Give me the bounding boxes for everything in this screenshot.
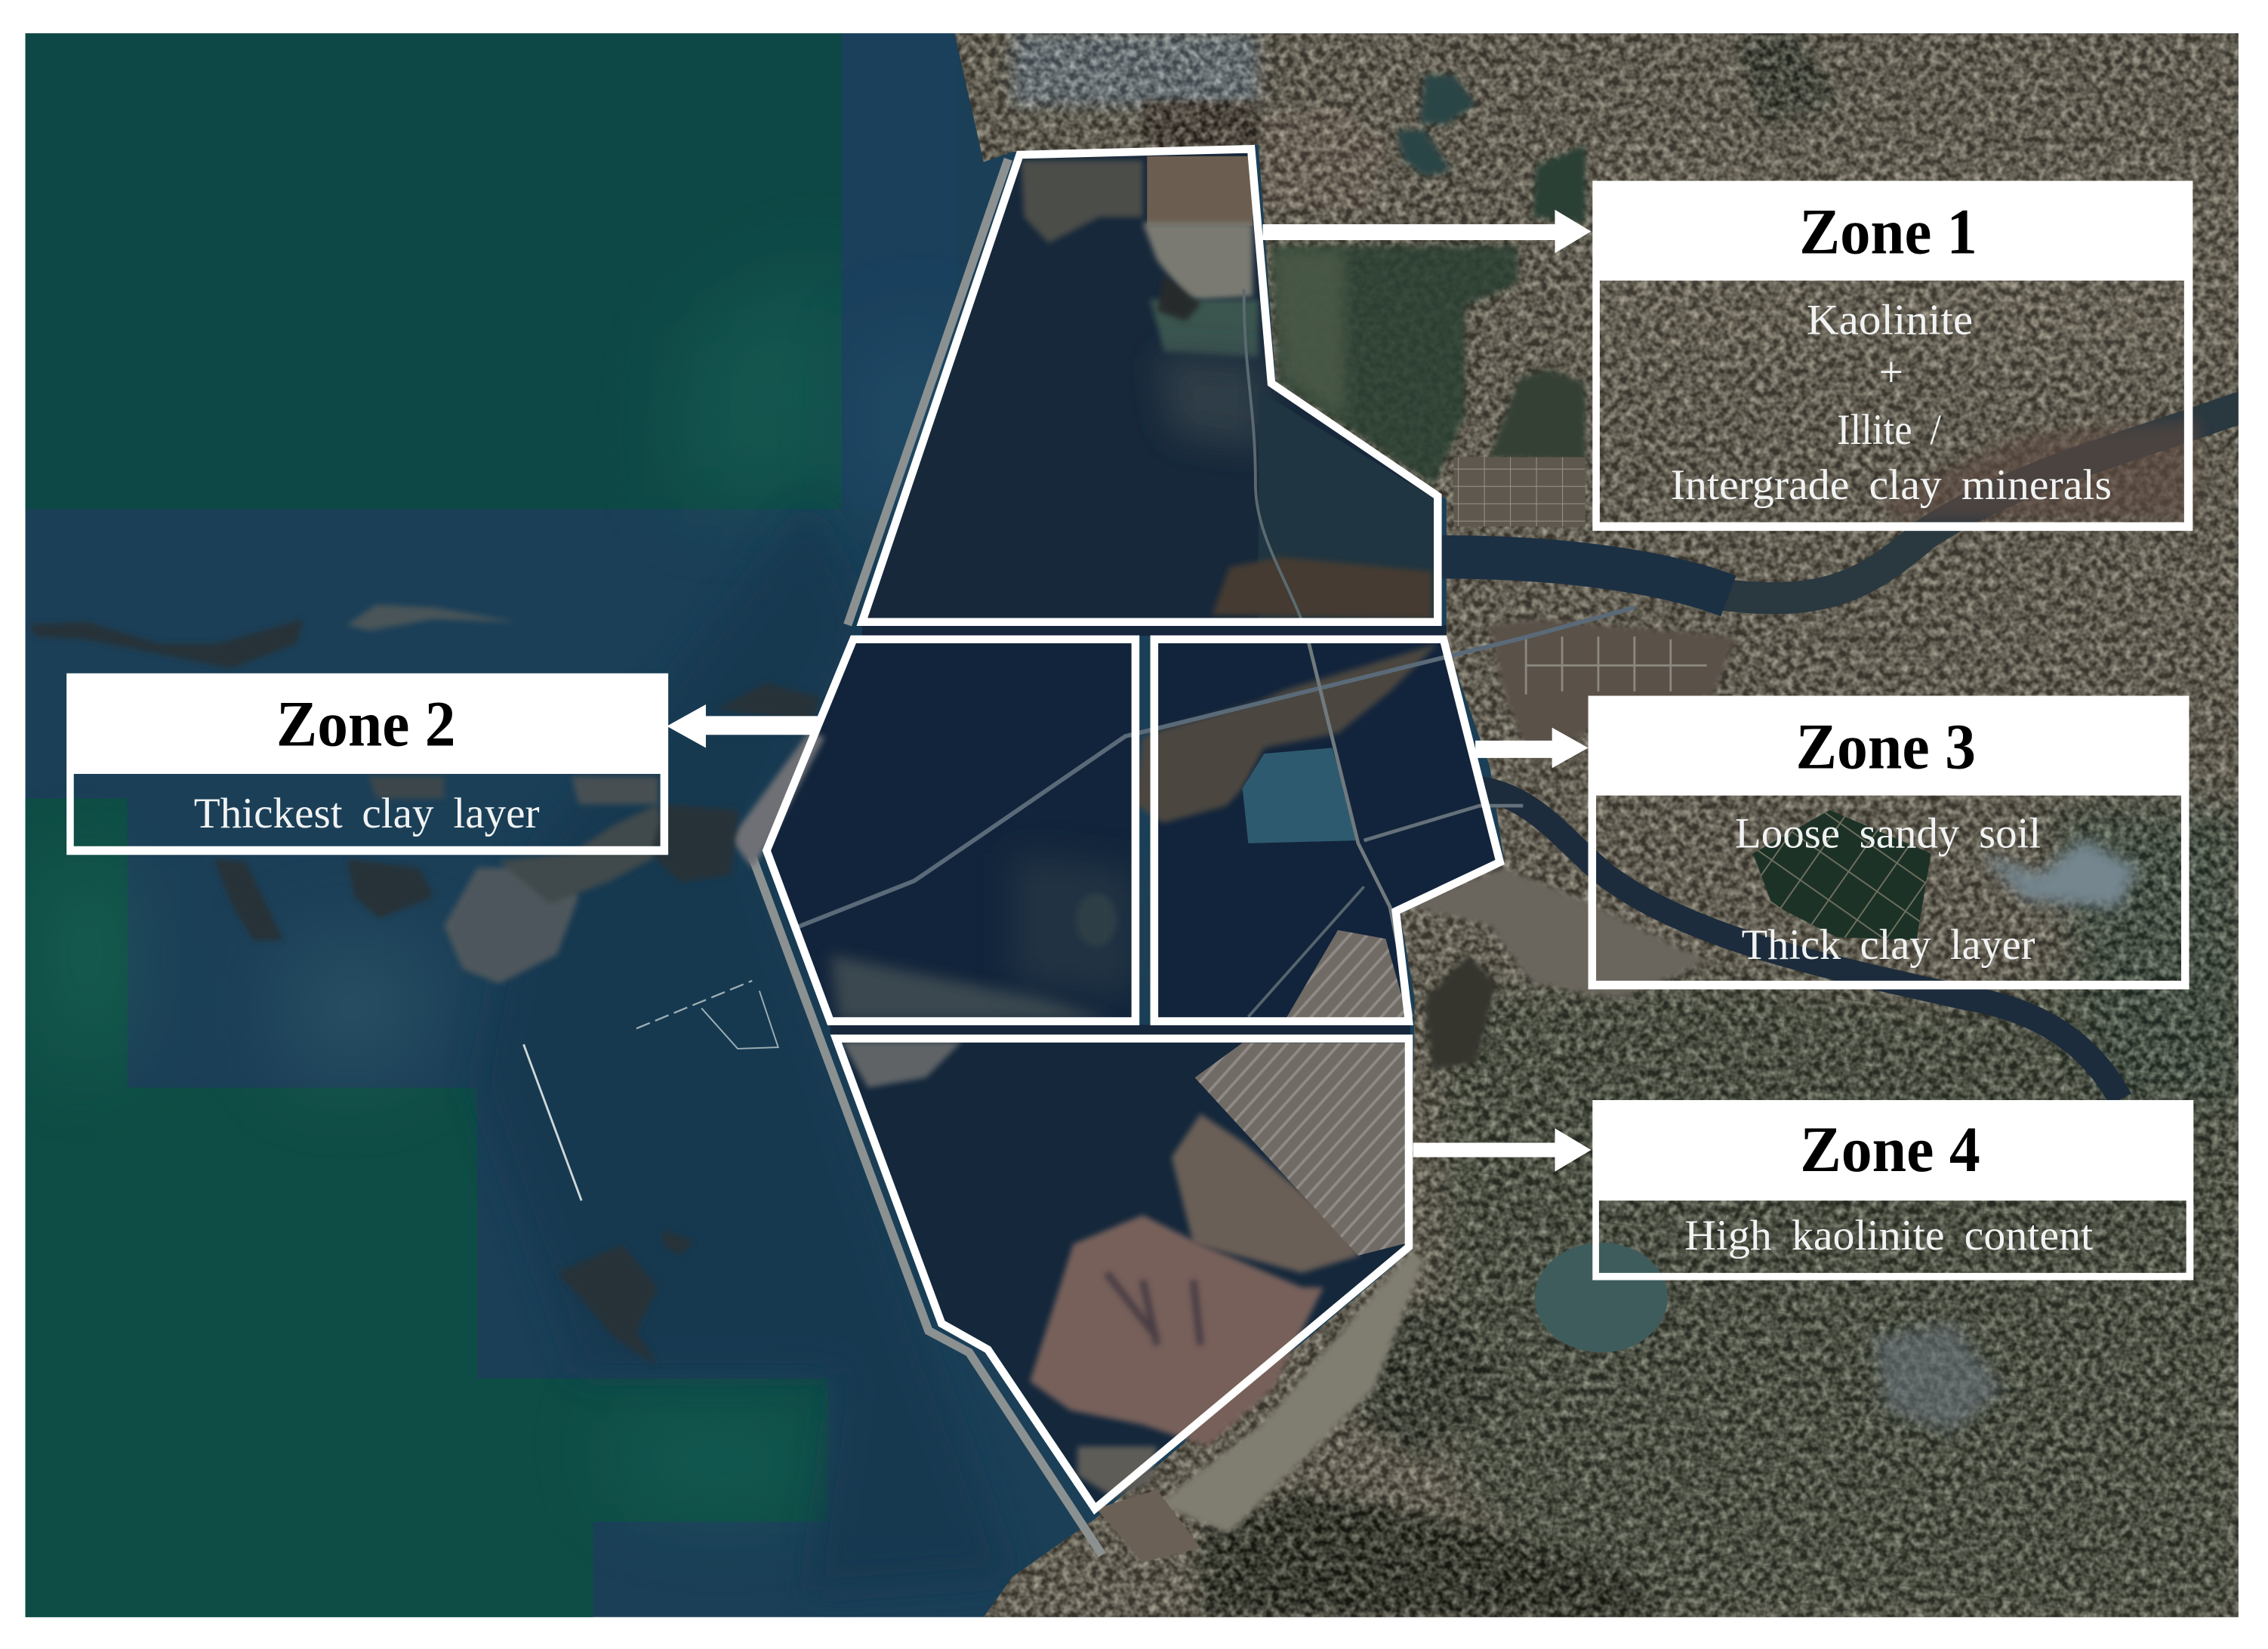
panel: zone 1	[1592, 180, 2193, 531]
western islands	[29, 605, 820, 1367]
zone 4 heading: Zone 4	[1800, 1113, 1980, 1185]
zone 3 water	[1154, 640, 1500, 1022]
zone 3 frame	[1589, 695, 2189, 989]
zone 3 salt flats	[1284, 930, 1409, 1022]
zone 1 heading: Zone 1	[1799, 195, 1977, 267]
bluish patch in zone 3 box	[1982, 839, 2138, 908]
zone 4 frame	[1592, 1100, 2193, 1280]
zone 4 salt flats	[1194, 1043, 1409, 1256]
zone 3 heading: Zone 3	[1795, 710, 1976, 782]
mountains	[1200, 1490, 1663, 1617]
dark hill	[1425, 954, 1497, 1071]
zone 2 water	[766, 640, 1136, 1022]
salt grid north	[1453, 457, 1585, 526]
zone 3 text	[1735, 810, 2041, 969]
zone 2 frame	[66, 673, 668, 855]
zone 4 north-west shoal	[842, 1041, 962, 1088]
sand flats outside zone 4	[1157, 1251, 1425, 1533]
zone 2 heading: Zone 2	[276, 688, 455, 760]
zone 1 text: +	[1879, 349, 1903, 396]
arrow: zone 2	[667, 704, 821, 747]
dark farmland south-east	[1447, 926, 2239, 1617]
sea structures	[524, 981, 778, 1201]
zone 2 text: Thickest clay layer	[194, 790, 540, 837]
ponds north	[1397, 76, 1585, 223]
zone 1 water	[862, 149, 1438, 622]
zone 4 tidal flat	[1172, 1114, 1360, 1273]
turbid water plumes	[43, 333, 954, 1504]
zone 1 outline	[862, 149, 1438, 622]
brown banks of the river	[1881, 420, 2199, 521]
blue channel near the coast	[842, 33, 957, 373]
zone 3 outline	[1154, 640, 1500, 1022]
arrow: zone 1	[1263, 210, 1591, 253]
zone 4 water	[836, 1039, 1409, 1509]
zone 2 outline	[766, 640, 1136, 1022]
arrow: zone 4	[1413, 1128, 1591, 1172]
zone 1 text: Illite /	[1837, 406, 1941, 454]
east salt flats between rivers	[1490, 619, 1736, 766]
zone 1 text	[1671, 297, 2112, 509]
zone 1 tidal flats	[1022, 161, 1142, 243]
arrow: zone 3	[1475, 728, 1589, 768]
land	[926, 29, 2242, 1617]
panel: zone 3	[1589, 695, 2189, 989]
green striped orchard	[1490, 369, 1585, 461]
tan field	[1264, 107, 1390, 208]
sea wall north	[848, 159, 1008, 625]
lake	[1535, 1243, 1668, 1352]
town in the south-east	[1873, 1324, 2003, 1432]
zone 4 text: High kaolinite content	[1684, 1212, 2093, 1259]
zone 4 outline	[836, 1039, 1409, 1509]
city district	[1012, 33, 1259, 106]
zone 3 text: Loose sandy soil	[1735, 810, 2041, 858]
east green strip	[2054, 810, 2239, 1099]
zone 3 island	[1136, 644, 1438, 823]
causeways	[752, 159, 1635, 1555]
green sea patch north-west	[25, 33, 842, 509]
lighter farmland north-east	[1591, 145, 2239, 362]
zone 1 text: Kaolinite	[1807, 297, 1973, 344]
dark channel under zone gaps	[830, 630, 1447, 1030]
zone 3 text: Thick clay layer	[1742, 921, 2035, 969]
land texture	[926, 33, 2242, 1617]
zone 1 frame	[1592, 180, 2193, 531]
south river	[1478, 788, 2121, 1099]
panel: zone 2	[66, 673, 668, 855]
forest strip	[1271, 246, 1518, 485]
grey reclaimed land south of river	[1403, 868, 1707, 998]
zone 3 blue pond	[1243, 747, 1358, 843]
zone 1 text: Intergrade clay minerals	[1671, 461, 2112, 509]
panel: zone 4	[1592, 1100, 2193, 1280]
zone 4 delta	[1030, 1215, 1324, 1447]
fields in zone 3 box	[1753, 810, 1931, 940]
north river	[1721, 408, 2239, 598]
land bridge to the islands	[730, 730, 824, 868]
nearshore water	[477, 507, 1012, 1591]
green sea patch south-west	[25, 799, 829, 1617]
zone 2 south shoal	[830, 954, 1114, 1022]
lighter plume in green sea	[695, 304, 836, 486]
road across the bay	[797, 608, 1635, 927]
sea wall south	[752, 856, 1102, 1555]
